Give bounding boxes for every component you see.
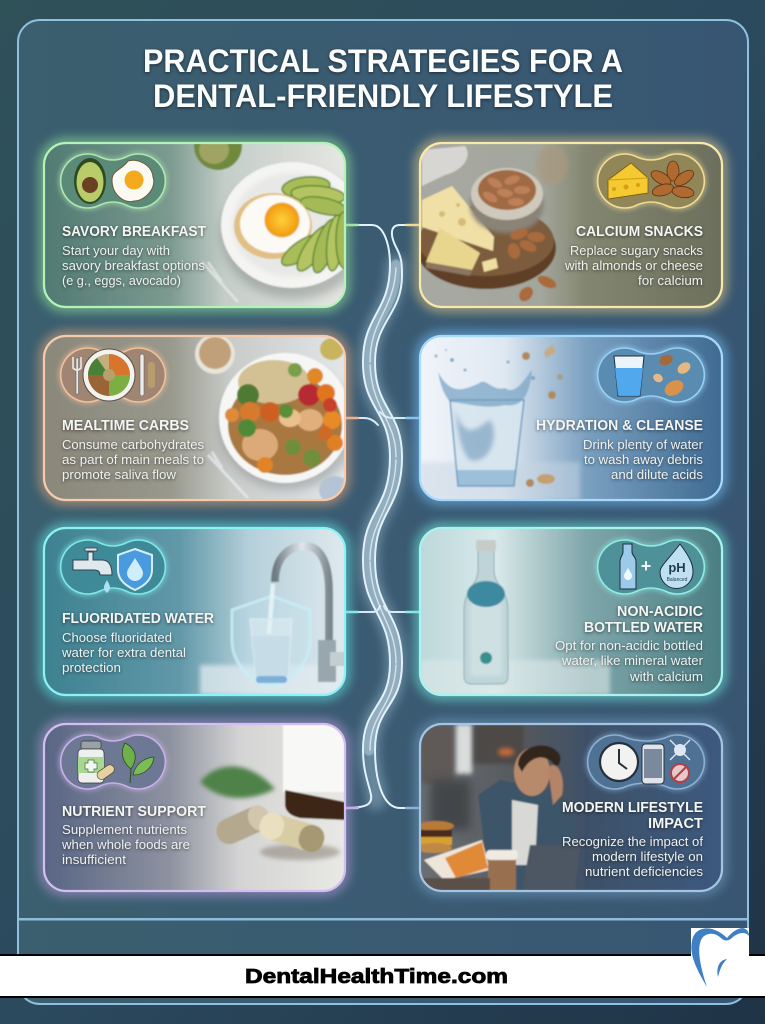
body text — [62, 437, 204, 482]
heading: MODERN LIFESTYLE — [562, 800, 703, 816]
body text — [555, 638, 704, 684]
body text — [61, 630, 186, 675]
photo: grain bowl — [44, 334, 356, 504]
panel: modern lifestyle impact — [416, 724, 722, 892]
icon: water glass and food particles — [598, 348, 704, 402]
body text: Start your day with — [62, 243, 170, 258]
title: PRACTICAL STRATEGIES FOR A — [143, 43, 623, 79]
photo: stressed man with fast food in city — [416, 724, 722, 892]
body text: promote saliva flow — [62, 467, 177, 482]
body text: protection — [62, 660, 121, 675]
body text: modern lifestyle on — [592, 849, 703, 864]
body text — [62, 243, 206, 288]
website name: DentalHealthTime.com — [245, 965, 508, 988]
body text — [562, 834, 704, 879]
body text: Replace sugary snacks — [570, 243, 703, 258]
panel: calcium snacks — [416, 143, 722, 307]
heading: NUTRIENT SUPPORT — [62, 804, 206, 820]
icon: avocado and egg — [61, 154, 165, 208]
heading: IMPACT — [648, 816, 703, 832]
connector: flowing central ribbon with branches — [345, 225, 420, 808]
body text: with calcium — [629, 669, 703, 684]
body text — [61, 822, 190, 867]
photo: faucet filling glass inside shield — [44, 528, 345, 695]
photo: glass water bottle — [420, 528, 722, 695]
title — [143, 43, 623, 114]
footer band — [0, 954, 765, 998]
photo: capsules, leaf and supplement bottle — [44, 724, 348, 891]
body text: Drink plenty of water — [583, 437, 704, 452]
heading — [562, 800, 703, 832]
photo: egg and avocado plate — [45, 144, 344, 306]
panel: mealtime carbs — [44, 334, 356, 504]
icon: cheese and almonds — [598, 154, 704, 208]
panel: fluoridated water — [44, 528, 345, 695]
heading — [584, 604, 704, 636]
icon: supplement bottle and leaves — [61, 735, 165, 789]
body text: and dilute acids — [611, 467, 704, 482]
body text: nutrient deficiencies — [585, 864, 704, 879]
body text: Consume carbohydrates — [62, 437, 204, 452]
body text: Supplement nutrients — [62, 822, 188, 837]
icon: balanced plate with cutlery — [61, 348, 165, 402]
title: DENTAL-FRIENDLY LIFESTYLE — [153, 78, 613, 114]
panel: non-acidic bottled water — [420, 528, 722, 695]
body text: Choose fluoridated — [62, 630, 172, 645]
heading: SAVORY BREAKFAST — [62, 224, 206, 240]
body text: Recognize the impact of — [562, 834, 703, 849]
body text: insufficient — [62, 852, 126, 867]
body text: when whole foods are — [61, 837, 190, 852]
icon: bottle plus pH drop: Balanced — [667, 577, 688, 583]
photo: cheese and almonds on board — [416, 143, 722, 307]
heading: FLUORIDATED WATER — [62, 611, 215, 627]
icon: tap and shield — [61, 540, 165, 594]
icon: bottle plus pH drop: pH — [668, 560, 686, 575]
heading: CALCIUM SNACKS — [576, 224, 703, 240]
photo: splashing water glass with debris — [420, 336, 722, 500]
heading: BOTTLED WATER — [584, 620, 704, 636]
heading: HYDRATION & CLEANSE — [536, 418, 703, 434]
body text: (e g., eggs, avocado) — [62, 273, 181, 288]
body text: Opt for non-acidic bottled — [555, 638, 703, 653]
body text: for calcium — [638, 273, 703, 288]
body text: savory breakfast options — [62, 258, 206, 273]
body text — [583, 437, 704, 482]
icon: clock, phone and no-sun symbol — [588, 735, 704, 789]
icon: bottle plus pH drop — [598, 540, 704, 594]
body text — [564, 243, 703, 288]
body text: to wash away debris — [584, 452, 704, 467]
body text: water for extra dental — [61, 645, 186, 660]
body text: as part of main meals to — [62, 452, 204, 467]
panel: nutrient support — [44, 724, 348, 891]
heading: MEALTIME CARBS — [62, 418, 189, 434]
frame footer divider — [18, 918, 748, 920]
body text: water, like mineral water — [561, 653, 704, 668]
panel: savory breakfast — [44, 122, 369, 307]
body text: with almonds or cheese — [564, 258, 703, 273]
icon: bottle plus pH drop: + — [641, 556, 651, 576]
heading: NON-ACIDIC — [617, 604, 704, 620]
logo: tooth — [691, 928, 749, 987]
panel: hydration and cleanse — [420, 336, 722, 500]
